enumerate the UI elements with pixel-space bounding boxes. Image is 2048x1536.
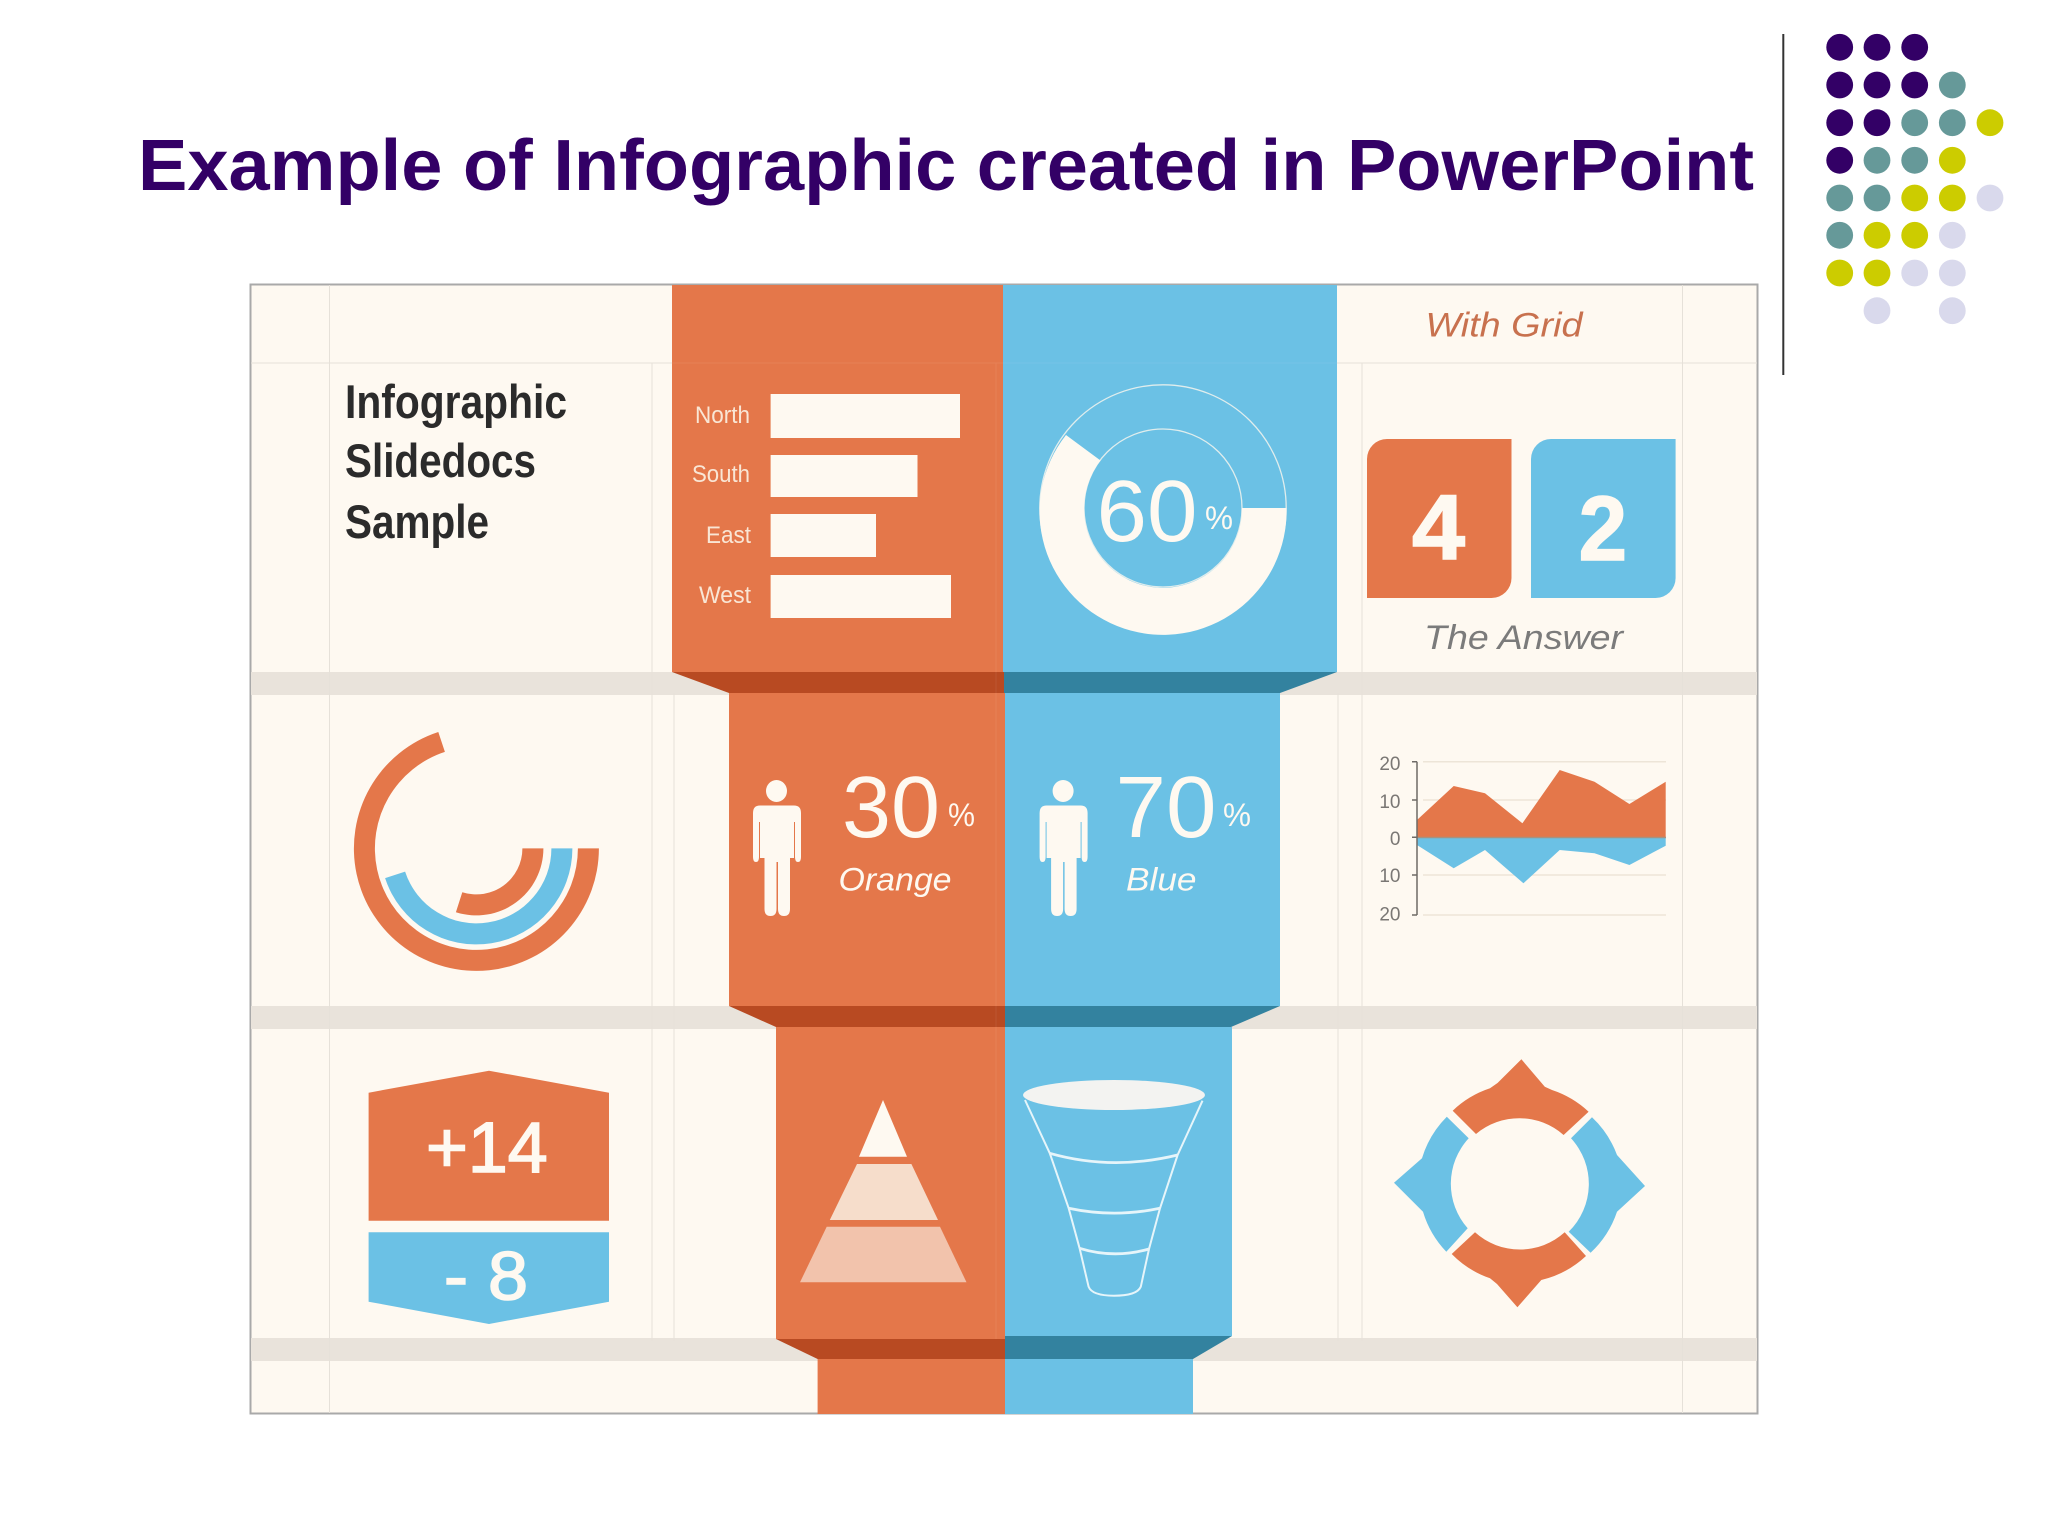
number tiles: 4 and 2 (1367, 439, 1676, 598)
stat: 70% Blue (1116, 759, 1251, 898)
stat: 30% Orange (838, 759, 975, 898)
radial bar chart (354, 732, 599, 971)
bar chart: regions (692, 394, 960, 618)
area chart: 20 (1379, 905, 1400, 926)
badge: +14 / -8: +14 (426, 1109, 548, 1188)
area chart: 10 (1379, 792, 1400, 813)
stat: 30% Orange: Orange (838, 862, 952, 898)
donut chart: 60%: % (1205, 500, 1233, 536)
badge: +14 / -8 (369, 1071, 609, 1324)
area chart: 20 (1379, 754, 1400, 775)
number tiles: 4 and 2: 4 (1412, 477, 1465, 579)
heading: Infographic Slidedocs Sample (345, 375, 567, 548)
vertical divider (1782, 34, 1784, 375)
icon: person orange (753, 780, 801, 916)
bar chart: regions: North (695, 402, 750, 429)
orange ribbon (672, 285, 1005, 1414)
decorative dot grid (1826, 34, 2003, 324)
title: Example of Infographic created in PowerPoint (138, 126, 1754, 206)
donut chart: 60% (1040, 385, 1287, 635)
bar chart: regions: West (699, 582, 751, 609)
heading: Infographic Slidedocs Sample: Slidedocs (345, 434, 536, 487)
stat: 70% Blue: Blue (1126, 862, 1196, 898)
icon: person blue (1040, 780, 1088, 916)
area chart: 0 (1390, 829, 1400, 850)
bar chart: regions: East (706, 522, 751, 549)
number tiles: 4 and 2: 2 (1579, 478, 1627, 580)
label: With Grid: With Grid (1426, 306, 1584, 344)
heading: Infographic Slidedocs Sample: Infographic (345, 375, 567, 428)
badge: +14 / -8: - 8 (444, 1238, 528, 1314)
donut chart: 60%: 60 (1096, 463, 1198, 560)
shadow bands (251, 672, 1757, 1361)
area chart (1379, 754, 1666, 926)
area chart: 10 (1379, 866, 1400, 887)
icon: four-part ring (1394, 1059, 1645, 1307)
heading: Infographic Slidedocs Sample: Sample (345, 495, 489, 548)
stat: 70% Blue: 70 (1116, 759, 1216, 856)
icon: funnel (1023, 1080, 1205, 1296)
stat: 30% Orange: % (948, 797, 975, 833)
blue ribbon (1003, 285, 1337, 1414)
label: The Answer: The Answer (1424, 619, 1625, 657)
stat: 30% Orange: 30 (842, 759, 940, 856)
bar chart: regions: South (692, 461, 750, 488)
stat: 70% Blue: % (1223, 797, 1251, 833)
icon: pyramid (800, 1100, 966, 1282)
panel: infographic sample (250, 284, 1758, 1414)
